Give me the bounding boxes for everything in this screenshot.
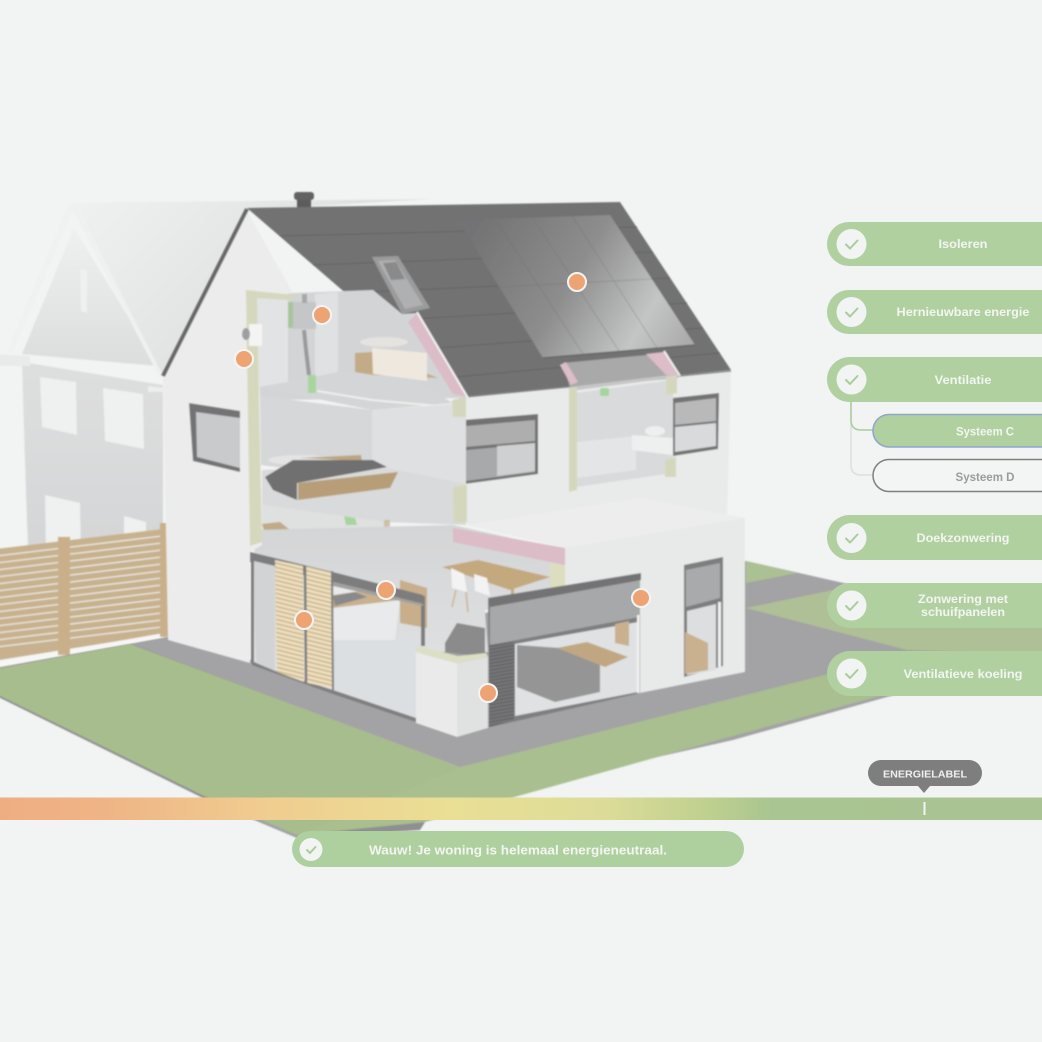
pink roof insulation [408,312,468,398]
ventilation unit [288,294,316,393]
sliding wooden shutters [275,560,333,690]
marker: screen rail [377,581,395,599]
outdoor air inlet [242,324,262,346]
attic bed [355,337,438,381]
option: Ventilatieve koeling: Ventilatieve koeling [904,667,1022,681]
floor slab [262,505,390,544]
interior stair sofa [445,623,485,657]
neighbouring house, faded [0,199,432,560]
wooden fence [0,523,170,671]
result message [292,831,744,867]
marker: ventilation unit [313,306,331,324]
option: Zonwering met schuifpanelen: schuifpanelen [921,605,1005,619]
main house cutaway [163,192,745,737]
sub-option: Systeem D [873,460,1042,492]
flat roof [467,498,745,548]
marker: sliding shutters [295,611,313,629]
hotspot markers [235,273,650,702]
grass: rear patch [746,561,797,583]
ghost gable [22,228,158,366]
bathroom cut-out [560,351,700,492]
bathroom side window [673,393,719,456]
front corner pillar [416,647,488,737]
green vent [600,388,609,396]
side window [684,557,723,677]
fabric screen [490,580,640,645]
ground floor extension [453,498,745,693]
bedroom bed [265,455,398,500]
option: Doekzonwering: Doekzonwering [916,531,1010,545]
energielabel tooltip: ENERGIELABEL [883,768,968,780]
ground floor interior [252,525,565,722]
connector: Systeem C [851,402,873,430]
option: Hernieuwbare energie [827,290,1042,334]
option: Hernieuwbare energie: Hernieuwbare energie [896,305,1030,319]
gable wall [163,211,293,663]
chimney [294,192,314,210]
result message: Wauw! Je woning is helemaal energieneutraal. [369,842,667,858]
roof window [372,256,430,314]
partition walls [257,298,288,387]
coffee table [557,642,628,667]
back cabinet [400,580,427,628]
grass: side patch [746,590,1042,655]
insulation pieces [560,362,578,385]
right upper wall [466,372,731,525]
connector: Systeem D [851,402,873,475]
marker: solar panels [568,273,586,291]
attic room [257,290,468,410]
ghost roof [75,199,432,376]
large sliding window with screen [488,573,641,727]
option: Zonwering met schuifpanelen: Zonwering met [918,592,1008,606]
ghost wall [22,362,163,560]
gable roof edge [163,209,247,376]
current level tick [924,802,926,815]
shelves [615,621,629,646]
option: Ventilatie [827,357,1042,402]
energielabel tooltip [868,760,982,793]
washbasin [632,435,700,455]
wall insulation strip [246,290,294,546]
grass: left lawn [0,644,460,835]
option: Isoleren: Isoleren [938,237,988,251]
grass: front strip [297,659,895,835]
option: Doekzonwering [827,515,1042,560]
option: Isoleren [827,222,1042,266]
option: Ventilatie: Ventilatie [934,373,992,387]
extension wall [565,518,745,693]
ghost windows [40,269,146,552]
fence posts [58,537,70,655]
sub-option: Systeem D: Systeem D [956,470,1015,484]
attic floor [259,372,453,410]
solar panels [458,215,695,358]
left glazing and frame [250,552,425,722]
option: Zonwering met schuifpanelen [827,583,1042,628]
marker: wall insulation [235,350,253,368]
metal louvers [489,642,514,727]
garden ground and paving [0,561,1042,838]
marker: fabric screen [632,589,650,607]
beige column [550,563,565,590]
chairs [451,568,490,596]
first floor front window [464,414,538,484]
option: Ventilatieve koeling [827,651,1042,696]
sub-option: Systeem C: Systeem C [956,424,1014,438]
pink floor insulation [453,528,565,565]
sub-option: Systeem C [873,414,1042,447]
energy label scale bar [0,798,1042,820]
marker: louvers [479,684,497,702]
bedroom storey [260,396,467,580]
gable window [189,403,240,472]
dining table [442,560,550,590]
roof [247,202,731,397]
sofa [517,645,600,702]
